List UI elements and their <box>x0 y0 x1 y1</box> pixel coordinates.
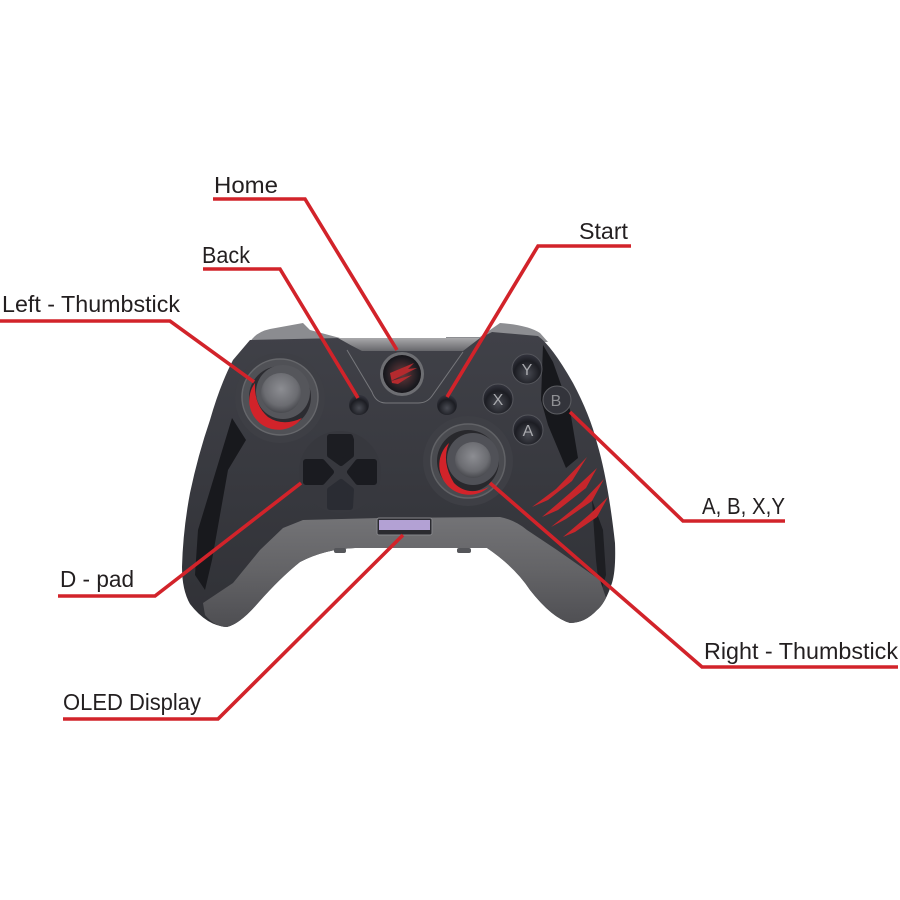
trigger nubs <box>334 548 471 553</box>
label: A, B, X, Y <box>570 412 785 521</box>
dark gloss panel right <box>541 345 578 468</box>
left thumbstick <box>235 353 325 443</box>
start button <box>437 395 457 415</box>
right thumbstick <box>423 416 513 506</box>
home button <box>380 352 424 396</box>
dark gloss panel left <box>195 418 246 590</box>
label: Back: Back <box>202 242 250 268</box>
face buttons <box>483 354 571 445</box>
D-pad <box>299 431 381 513</box>
label: Left - Thumbstick: Left - Thumbstick <box>2 291 180 317</box>
label: OLED Display: OLED Display <box>63 689 201 715</box>
shoulder bumpers <box>250 323 548 348</box>
claw logo <box>532 457 608 537</box>
label: Right - Thumbstick: Right - Thumbstick <box>704 638 898 664</box>
label: D-pad: D - pad <box>60 566 134 592</box>
controller <box>182 323 615 627</box>
face buttons: B <box>551 393 561 410</box>
label: Back <box>202 242 358 398</box>
label: A, B, X, Y: A, B, X,Y <box>702 493 785 519</box>
label: OLED Display <box>63 535 403 719</box>
top silver band <box>338 338 480 351</box>
label: Start <box>447 218 631 397</box>
face buttons: A <box>523 423 534 440</box>
label: Right - Thumbstick <box>490 483 898 667</box>
back button <box>349 395 369 415</box>
label: Home <box>213 172 397 350</box>
label: Left - Thumbstick <box>0 291 254 382</box>
label: D-pad <box>58 483 301 596</box>
label: Start: Start <box>579 218 629 244</box>
OLED display <box>377 518 432 535</box>
controller body <box>182 332 615 627</box>
label: Home: Home <box>214 172 278 198</box>
lower grey band <box>203 517 606 627</box>
face buttons: X <box>493 392 504 409</box>
face buttons: Y <box>522 362 533 379</box>
